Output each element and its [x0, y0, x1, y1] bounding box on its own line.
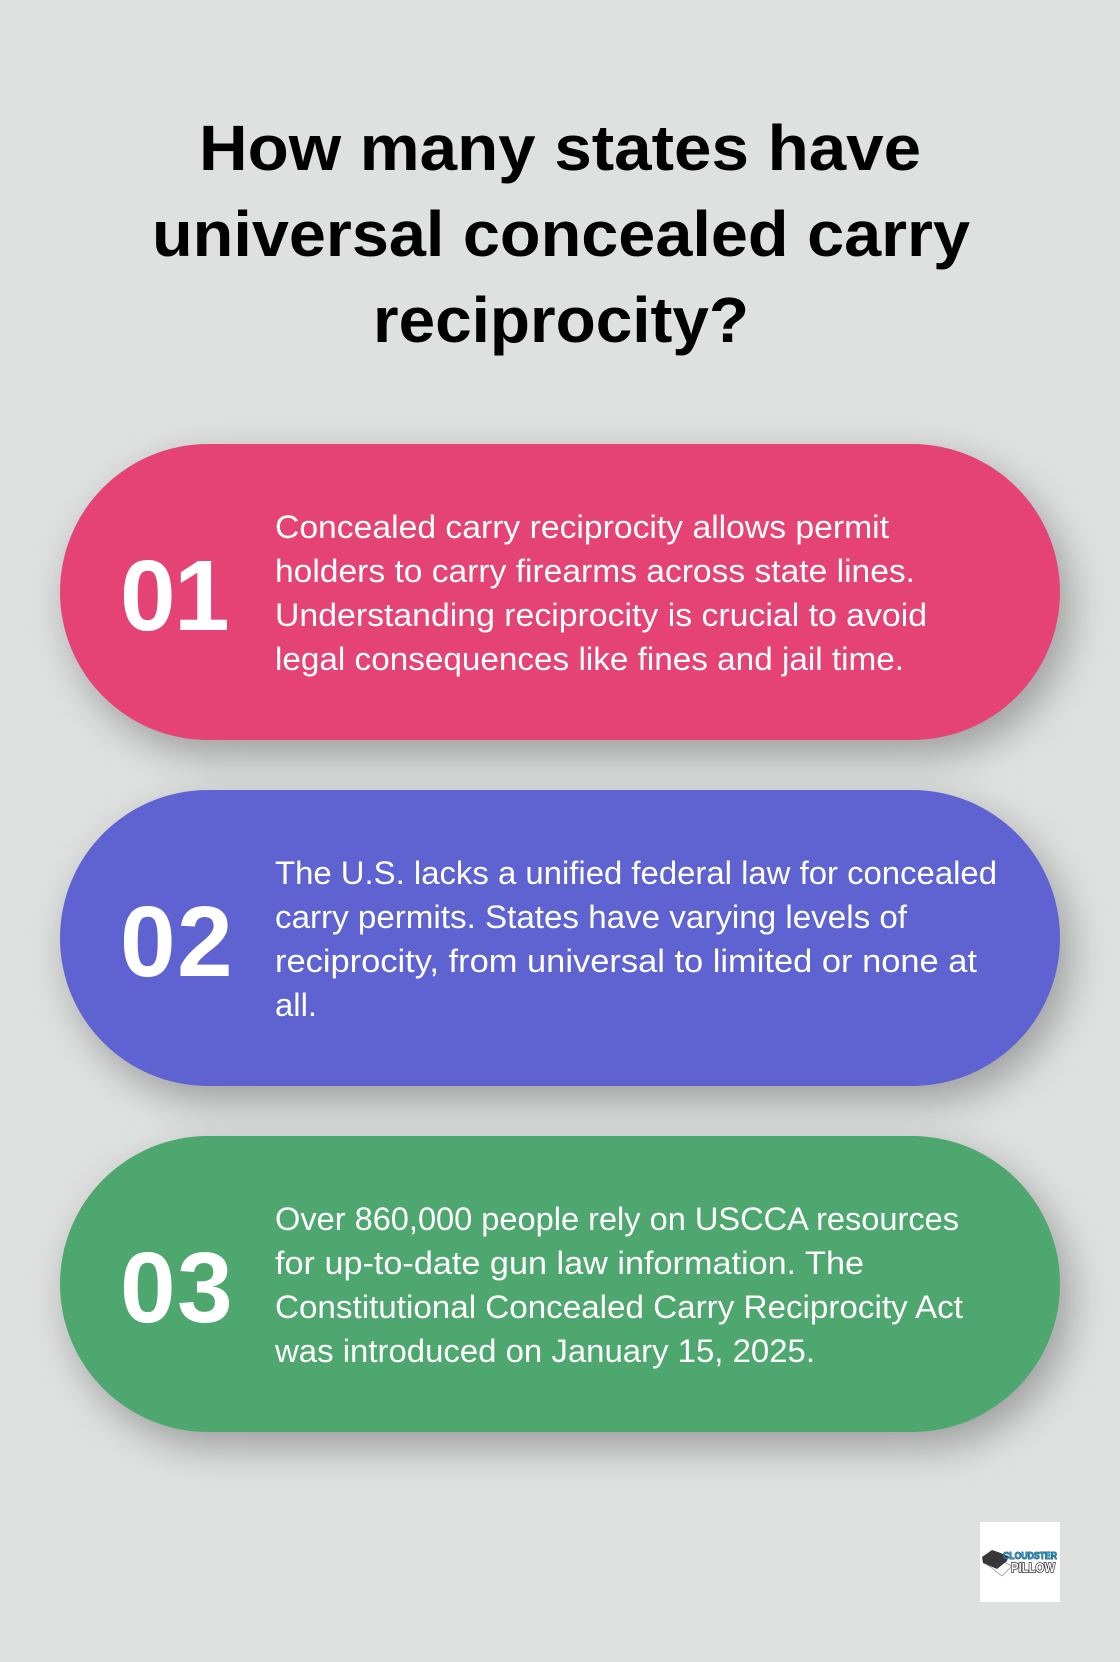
text block: step 01: Concealed carry reciprocity allows permit [275, 509, 889, 545]
text block: step 03: was introduced on January 15, 2025. [274, 1333, 815, 1369]
title: How many states have [199, 112, 921, 184]
text block: step 01: legal consequences like fines and jail time. [275, 641, 904, 677]
text block: step 02: carry permits. States have varying levels of [275, 899, 907, 935]
number 03: 03 [120, 1232, 233, 1344]
text block: step 03: Constitutional Concealed Carry Reciprocity Act [275, 1289, 963, 1325]
number 02: 02 [120, 886, 233, 998]
title [152, 112, 970, 356]
text block: step 02: The U.S. lacks a unified federal law for concealed [275, 855, 997, 891]
title: universal concealed carry [152, 198, 970, 270]
number 01: 01 [120, 540, 230, 652]
text block: step 01: Understanding reciprocity is crucial to avoid [275, 597, 927, 633]
icon: logo [980, 1522, 1060, 1602]
text block: step 02 [275, 855, 997, 1023]
title: reciprocity? [373, 284, 749, 356]
text block: step 03: Over 860,000 people rely on USCCA resources [275, 1201, 959, 1237]
panel: step 03 [60, 1136, 1060, 1432]
text block: step 01 [275, 509, 927, 677]
text block: step 01: holders to carry firearms across state lines. [275, 553, 915, 589]
text block: step 03: for up-to-date gun law information. The [275, 1245, 864, 1281]
panel: step 01 [60, 444, 1060, 740]
panel: step 02 [60, 790, 1060, 1086]
text block: step 03 [274, 1201, 963, 1369]
text block: step 02: all. [275, 987, 317, 1023]
text block: step 02: reciprocity, from universal to limited or none at [275, 943, 977, 979]
